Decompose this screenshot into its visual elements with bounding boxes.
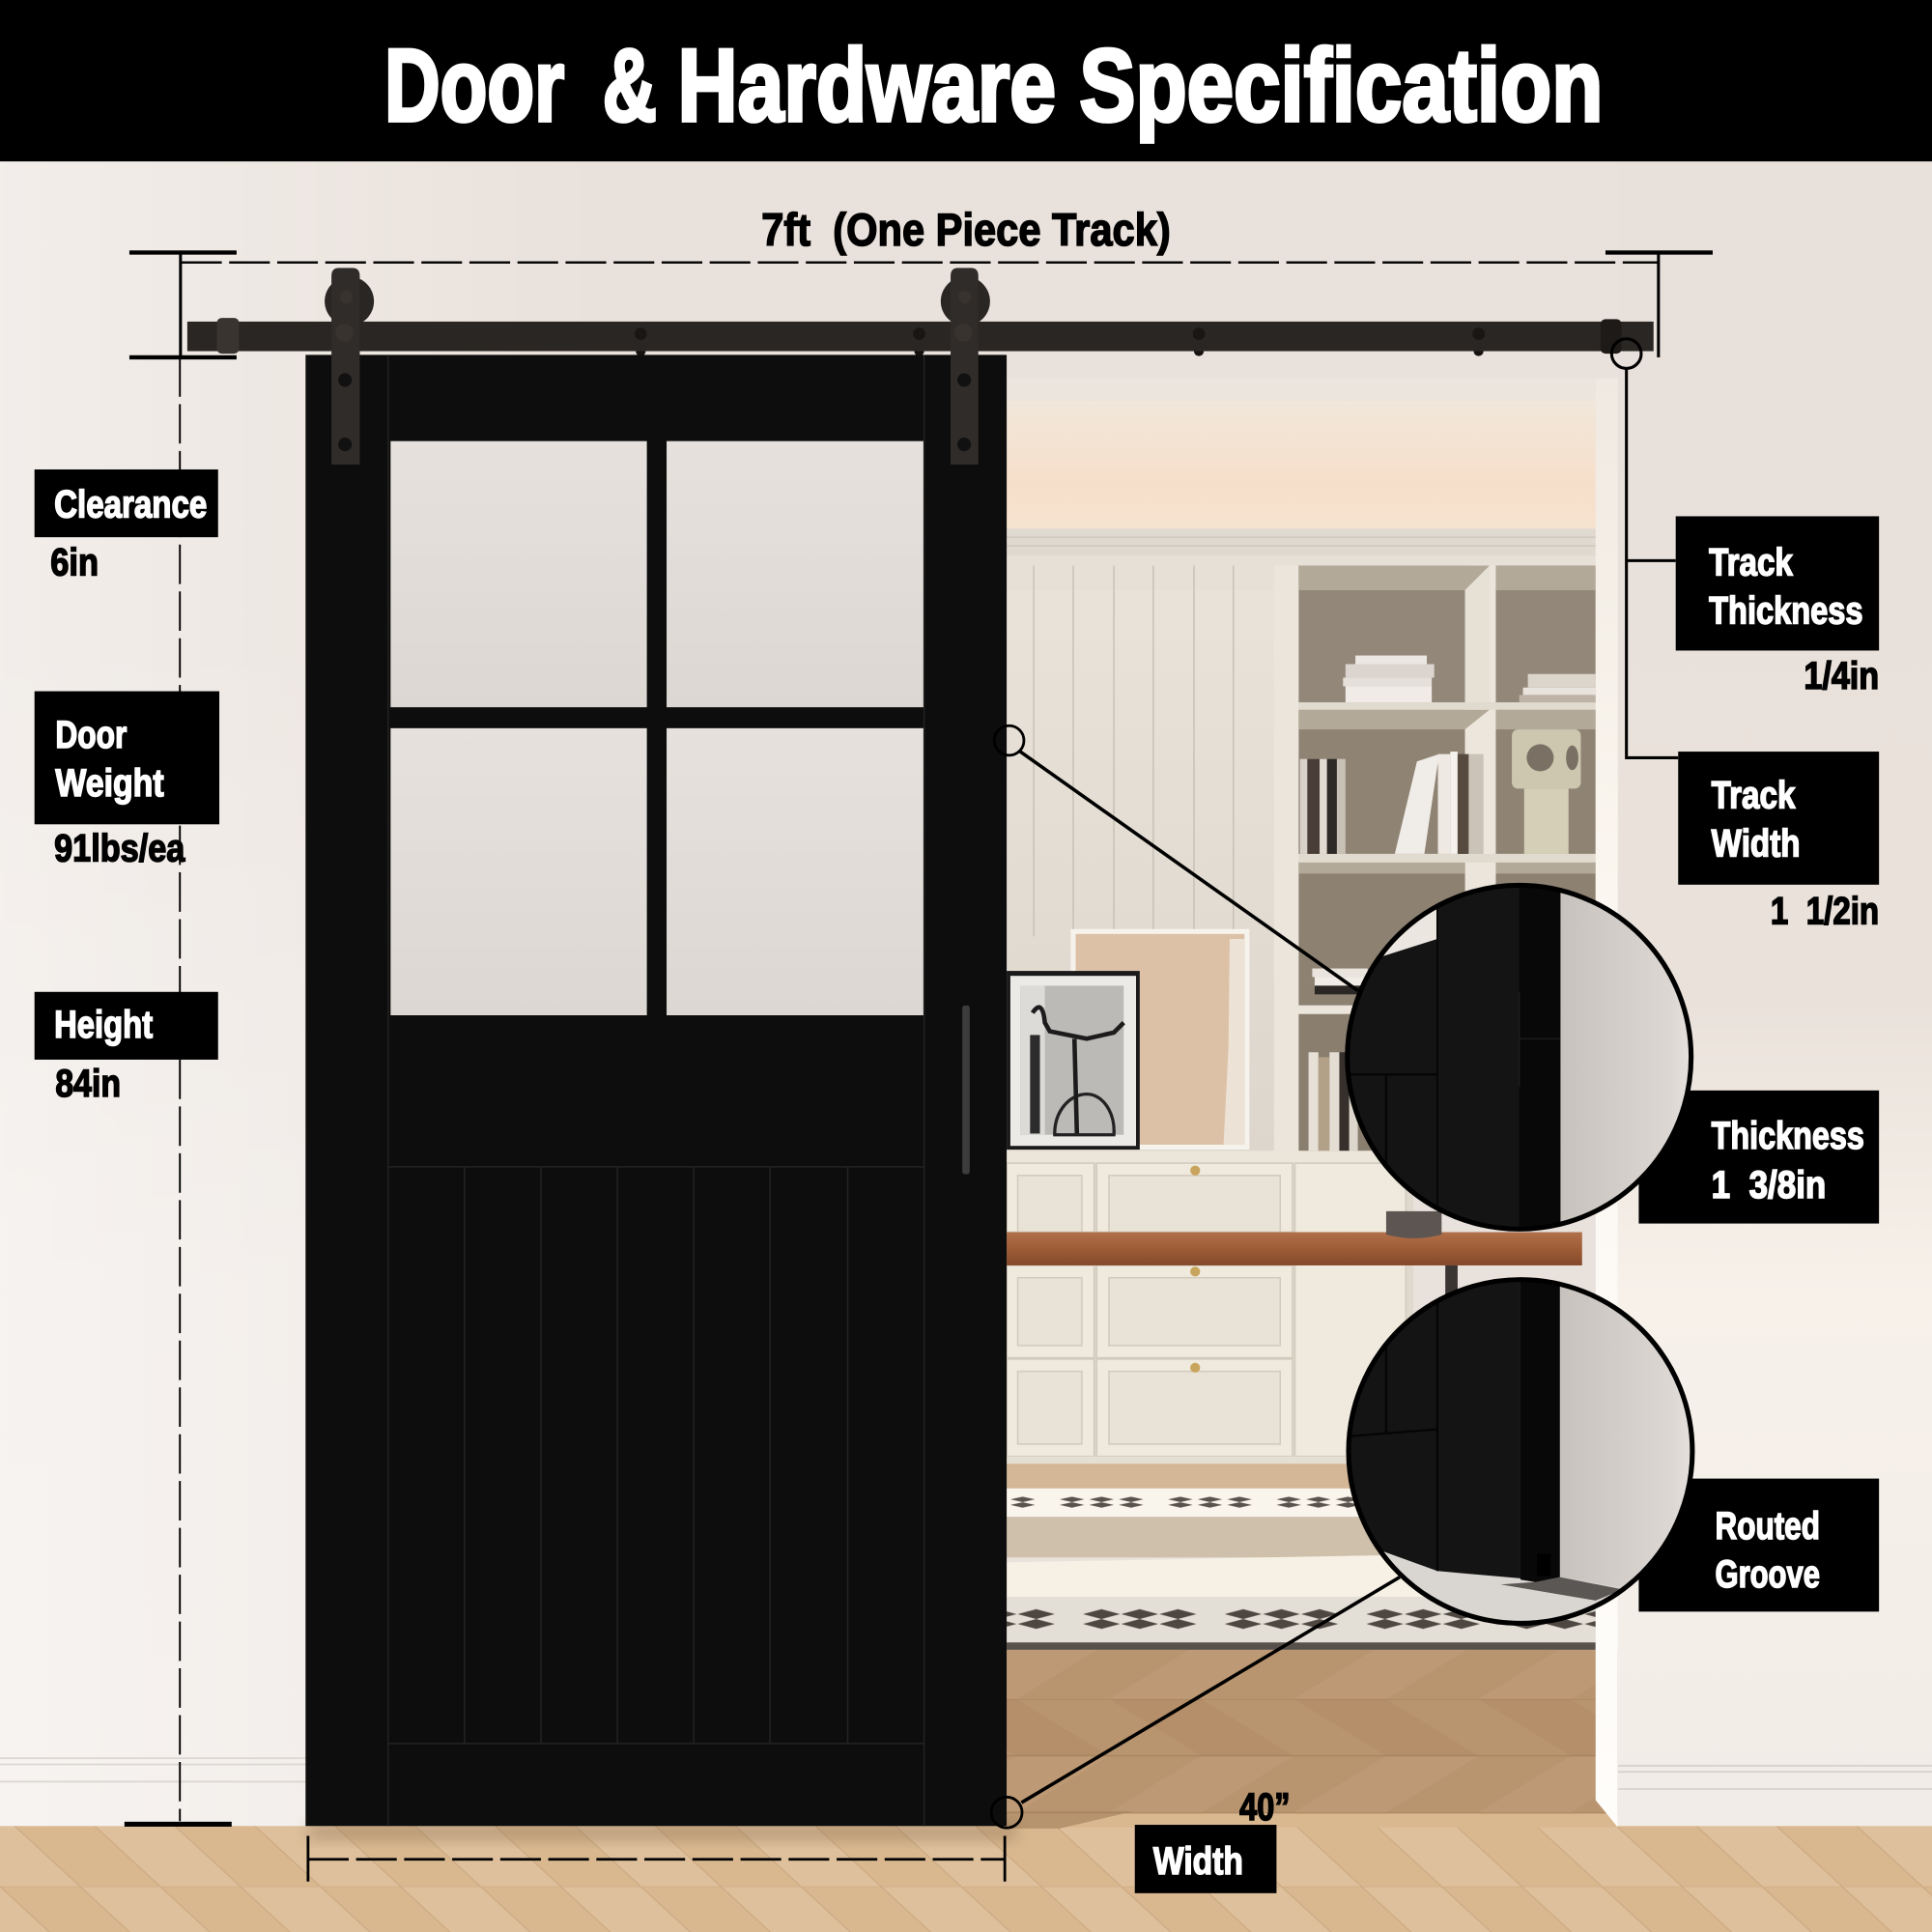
detail circle: routed groove [1343,1275,1700,1633]
bookcase [1274,565,1597,1157]
track width label: Width [1712,822,1801,865]
door weight label: 91lbs/ea [54,828,185,870]
title [384,27,1603,143]
cabinets [1007,1151,1413,1457]
track width label [1678,752,1879,933]
detail circle: door thickness [1343,881,1700,1238]
roller wheels [325,276,990,326]
crown moulding [1007,528,1596,568]
track width label: Track [1712,775,1796,817]
thickness label: 1 3/8in [1712,1164,1826,1207]
track thickness label: Track [1709,542,1794,584]
beige art print [1070,929,1249,1150]
routed groove label: Routed [1716,1505,1820,1548]
track length dimension [129,205,1713,357]
clearance label: 6in [50,542,99,584]
title: Hardware [678,27,1056,143]
track length label: 7ft (One Piece Track) [761,205,1171,256]
glowing ceiling [1007,401,1596,529]
title: & [603,27,657,143]
track width label: 1 1/2in [1771,891,1879,933]
doorway right jamb [1596,379,1618,1828]
thickness label: Thickness [1712,1115,1864,1157]
door weight label: Weight [55,762,164,805]
door shadow on floor [308,1826,1016,1838]
door weight label [35,692,219,870]
wooden table top with cup [1007,1211,1582,1296]
door height dimension [125,357,232,1827]
panelled wall [1007,565,1278,1157]
height label: 84in [55,1063,121,1105]
door edge callout line top [994,725,1358,991]
door handle [962,1006,970,1175]
title bar [0,0,1932,161]
door edge callout line bottom [991,1577,1400,1828]
width label [1135,1786,1290,1893]
clearance label [35,469,218,584]
title: Door [384,27,564,143]
routed groove label [1638,1479,1879,1611]
track callout lines [1611,339,1678,757]
glass panes [390,441,924,1015]
thickness label [1638,1091,1879,1224]
door width dimension [308,1836,1005,1882]
doorway head [1007,379,1596,401]
sliding track [187,318,1654,356]
clearance label: Clearance [54,484,207,526]
height label: Height [54,1004,153,1046]
shelf books and sculpture [1300,656,1596,1151]
height label [35,992,218,1105]
door weight label: Door [55,714,127,756]
barn door [305,355,1007,1826]
track thickness label [1676,516,1879,697]
room seen through doorway [1007,379,1618,1829]
right hanger strap [951,268,979,465]
door plank seams [388,355,924,1826]
room floor and rug [1007,1457,1618,1829]
bicycle photo [1007,971,1140,1150]
width label: 40” [1239,1786,1290,1829]
track thickness label: Thickness [1709,589,1863,632]
left hanger strap [331,268,359,465]
baseboard [0,1758,1932,1789]
title: Specification [1079,27,1603,143]
width label: Width [1153,1840,1243,1883]
wood floor [0,1826,1932,1932]
track thickness label: 1/4in [1804,655,1879,697]
routed groove label: Groove [1716,1553,1820,1596]
